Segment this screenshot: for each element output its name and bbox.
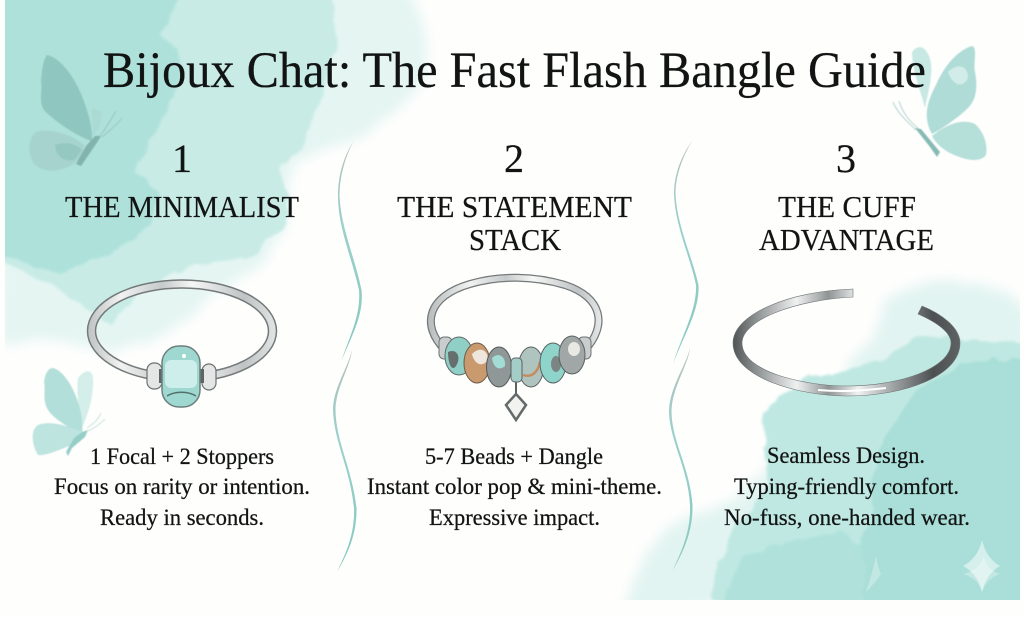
column 2: heading (397, 189, 632, 257)
column 3: heading: THE CUFF (778, 189, 916, 224)
watercolor wash: bottom right (625, 280, 1024, 610)
column 2: description: Expressive impact. (429, 505, 600, 530)
divider: second wavy line (669, 141, 699, 570)
bangle: the cuff (733, 289, 960, 396)
column 1: description: 1 Focal + 2 Stoppers (90, 444, 274, 469)
divider: first wavy line (333, 142, 362, 572)
title: Bijoux Chat: The Fast Flash Bangle Guide (103, 43, 926, 99)
butterfly: top right (893, 46, 987, 160)
column 3: heading: ADVANTAGE (759, 222, 934, 257)
column 2: description: Instant color pop & mini-theme. (367, 474, 662, 499)
bangle: the minimalist (92, 284, 272, 407)
column 1: description: Ready in seconds. (100, 505, 264, 530)
column 3: description: No-fuss, one-handed wear. (724, 505, 970, 530)
column 3: description: Seamless Design. (767, 443, 925, 468)
butterfly: top left (29, 55, 122, 171)
column 3: heading (759, 189, 934, 257)
column 2: number: 2 (504, 136, 524, 181)
sparkle: bottom right (866, 540, 1000, 592)
column 2: heading: THE STATEMENT (397, 189, 632, 224)
column 2: description: 5-7 Beads + Dangle (425, 444, 603, 469)
butterfly: bottom left (33, 368, 105, 456)
column 2: description (367, 444, 662, 530)
column 1: heading: THE MINIMALIST (65, 189, 299, 224)
column 3: description: Typing-friendly comfort. (734, 474, 959, 499)
column 1: number: 1 (172, 136, 192, 181)
column 1: description: Focus on rarity or intention. (54, 474, 310, 499)
bangle: the statement stack (431, 278, 599, 420)
column 3: description (724, 443, 970, 530)
column 2: heading: STACK (469, 222, 562, 257)
watercolor wash: top left (0, 0, 427, 352)
column 1: description (54, 444, 310, 530)
column 3: number: 3 (836, 136, 856, 181)
